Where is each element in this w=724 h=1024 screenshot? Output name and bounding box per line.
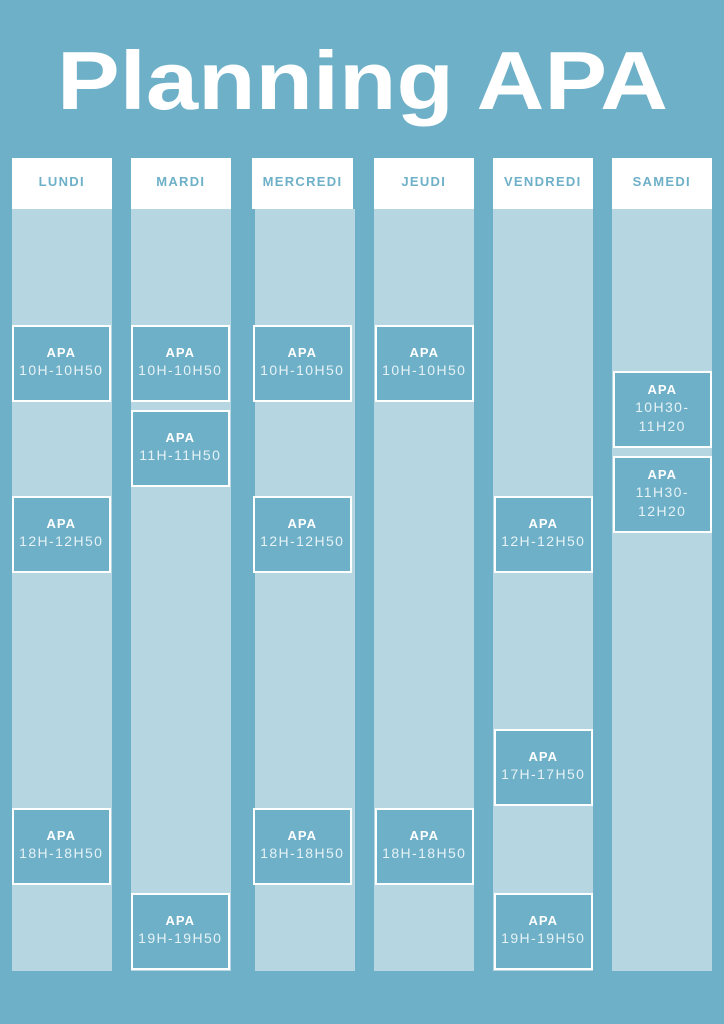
slot: samedi 10h30 bbox=[613, 371, 712, 448]
slot: samedi 11h30: APA bbox=[648, 467, 677, 482]
slot: lundi 12h bbox=[12, 496, 110, 573]
slot: mercredi 12h bbox=[253, 496, 352, 573]
slot: samedi 11h30: 11H30- bbox=[636, 484, 689, 500]
slot: mardi 11h: APA bbox=[166, 430, 195, 445]
panel: jeudi bbox=[374, 158, 474, 971]
header: lundi: LUNDI bbox=[39, 174, 85, 189]
slot: lundi 10h: 10H-10H50 bbox=[19, 362, 103, 378]
slot: lundi 12h: APA bbox=[46, 516, 76, 531]
slot: vendredi 12h bbox=[494, 496, 592, 573]
slot: lundi 10h bbox=[12, 325, 110, 402]
slot: samedi 10h30: APA bbox=[648, 382, 677, 397]
header: jeudi bbox=[374, 158, 474, 209]
slot: mercredi 12h: 12H-12H50 bbox=[260, 533, 344, 549]
slot: vendredi 19h bbox=[494, 893, 592, 970]
header: vendredi: VENDREDI bbox=[504, 174, 582, 189]
slot: samedi 10h30: 10H30- bbox=[635, 399, 689, 415]
slot: vendredi 17h: APA bbox=[528, 749, 558, 764]
slot: samedi 11h30 bbox=[613, 456, 712, 533]
panel: lundi bbox=[12, 158, 112, 971]
panel: mardi bbox=[131, 158, 231, 971]
slot: lundi 18h bbox=[12, 808, 110, 885]
slot: jeudi 18h: APA bbox=[410, 828, 439, 843]
slot: jeudi 18h bbox=[375, 808, 474, 885]
slot: mardi 19h bbox=[131, 893, 230, 970]
slot: vendredi 17h bbox=[494, 729, 592, 806]
slot: mardi 11h bbox=[131, 410, 230, 487]
header: mardi: MARDI bbox=[156, 174, 205, 189]
slot: mardi 11h: 11H-11H50 bbox=[139, 447, 221, 463]
slot: mardi 10h: 10H-10H50 bbox=[138, 362, 222, 378]
slot: samedi 11h30: 12H20 bbox=[638, 502, 686, 518]
slot: mercredi 10h: 10H-10H50 bbox=[260, 362, 344, 378]
slot: jeudi 10h: 10H-10H50 bbox=[382, 362, 466, 378]
slot: lundi 18h: 18H-18H50 bbox=[19, 845, 103, 861]
slot: mercredi 10h bbox=[253, 325, 352, 402]
slot: mercredi 18h: 18H-18H50 bbox=[260, 845, 344, 861]
panel: vendredi bbox=[493, 158, 593, 971]
slot: lundi 18h: APA bbox=[46, 828, 76, 843]
slot: mardi 10h: APA bbox=[166, 345, 195, 360]
slot: samedi 10h30: 11H20 bbox=[639, 418, 686, 434]
slot: mercredi 12h: APA bbox=[288, 516, 317, 531]
header: samedi bbox=[612, 158, 712, 209]
slot: mardi 19h: APA bbox=[166, 913, 195, 928]
slot: vendredi 19h: 19H-19H50 bbox=[501, 930, 585, 946]
slot: mercredi 18h: APA bbox=[288, 828, 317, 843]
header: mardi bbox=[131, 158, 230, 209]
slot: jeudi 10h bbox=[375, 325, 474, 402]
header: vendredi bbox=[493, 158, 592, 209]
header: mercredi: MERCREDI bbox=[263, 174, 342, 189]
slot: mercredi 10h: APA bbox=[288, 345, 317, 360]
header: mercredi bbox=[252, 158, 353, 209]
panel: mercredi bbox=[252, 158, 355, 971]
title: Planning APA bbox=[57, 34, 668, 127]
slot: lundi 12h: 12H-12H50 bbox=[19, 533, 103, 549]
slot: jeudi 18h: 18H-18H50 bbox=[382, 845, 466, 861]
slot: mardi 10h bbox=[131, 325, 230, 402]
slot: mercredi 18h bbox=[253, 808, 352, 885]
slot: vendredi 17h: 17H-17H50 bbox=[501, 766, 585, 782]
slot: vendredi 12h: 12H-12H50 bbox=[501, 533, 585, 549]
header: jeudi: JEUDI bbox=[401, 174, 446, 189]
slot: vendredi 19h: APA bbox=[528, 913, 558, 928]
slot: lundi 10h: APA bbox=[46, 345, 76, 360]
header: samedi: SAMEDI bbox=[633, 174, 691, 189]
slot: mardi 19h: 19H-19H50 bbox=[138, 930, 222, 946]
slot: jeudi 10h: APA bbox=[410, 345, 439, 360]
panel: samedi bbox=[612, 158, 712, 971]
header: lundi bbox=[12, 158, 112, 209]
slot: vendredi 12h: APA bbox=[528, 516, 558, 531]
